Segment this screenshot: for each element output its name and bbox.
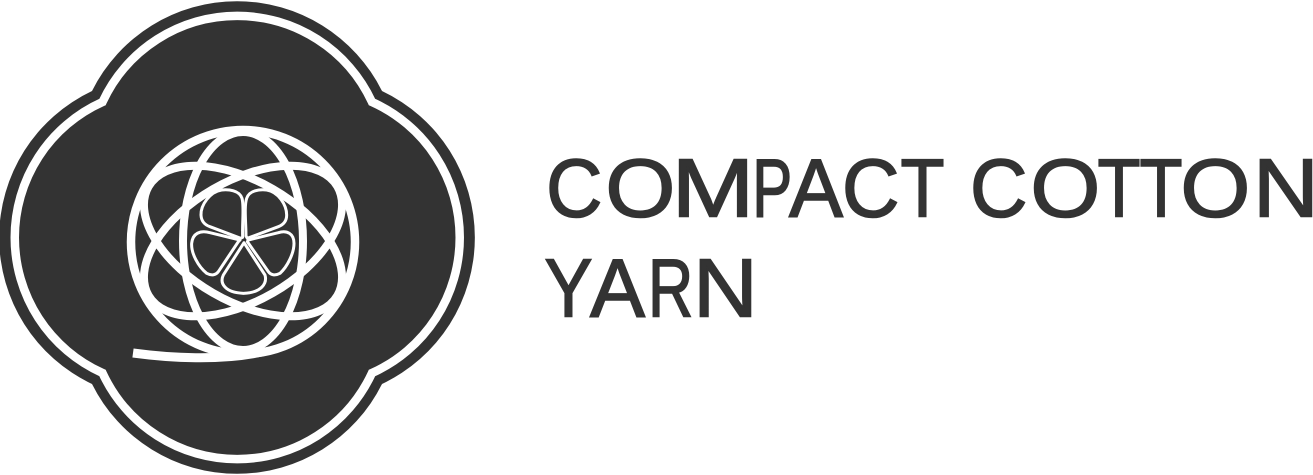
title line 1: M [672,142,754,234]
title line 1: T [900,142,944,234]
title line 2: N [693,242,758,334]
title [544,142,1313,334]
title line 2: A [590,242,646,334]
title line 1: A [789,142,844,234]
title line 1: P [752,142,792,234]
title line 1: O [1030,142,1100,234]
icon: cotton flower petals [192,190,294,293]
badge background [0,1,475,474]
title line 1: C [970,142,1028,234]
icon: yarn ball [119,130,367,358]
title line 1: T [1140,142,1182,234]
title line 1: T [1098,142,1140,234]
title line 1: O [605,142,675,234]
title line 2: R [648,242,693,334]
title line 1: N [1253,142,1313,234]
badge inner outline [15,16,460,459]
title line 2: Y [544,242,592,334]
emblem: cotton boll badge [0,1,475,474]
title line 1: C [546,142,602,234]
title line 1: C [842,142,900,234]
title line 1: O [1180,142,1250,234]
